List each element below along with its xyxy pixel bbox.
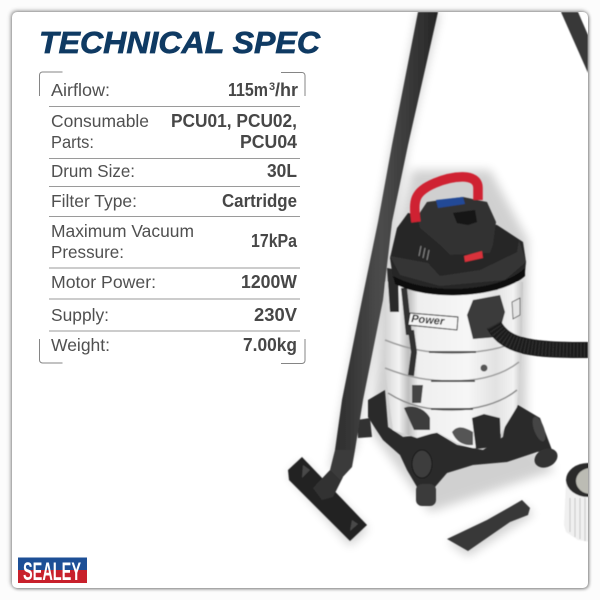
row: supply: 230V <box>254 305 297 325</box>
table corner brackets <box>40 72 305 364</box>
cartridge filter <box>564 462 588 542</box>
red lid catch <box>464 251 483 262</box>
row: motor power: Motor Power: <box>51 272 156 292</box>
row: consumable parts: PCU01, PCU02, <box>171 111 297 131</box>
row: filter type <box>51 191 297 211</box>
row: airflow: 3 <box>269 81 275 93</box>
row: drum size: 30L <box>267 161 297 181</box>
row: consumable parts: Consumable <box>51 111 149 131</box>
power badge on drum <box>408 313 458 330</box>
row: maximum vacuum pressure: Maximum Vacuum <box>51 221 194 241</box>
row: maximum vacuum pressure: 17kPa <box>251 231 298 251</box>
blue control label <box>436 197 465 208</box>
row: weight: Weight: <box>51 335 110 355</box>
row: supply: Supply: <box>51 305 109 325</box>
row: consumable parts: Parts: <box>51 132 94 152</box>
row: filter type: Filter Type: <box>51 191 137 211</box>
flexible hose <box>494 325 588 350</box>
row: airflow: Airflow: <box>51 80 110 100</box>
soft product shadow <box>288 12 555 556</box>
row: motor power: 1200W <box>241 272 297 292</box>
hose elbow <box>467 295 505 339</box>
row: weight: 7.00kg <box>243 335 297 355</box>
row: filter type: Cartridge <box>222 191 297 211</box>
row: drum size <box>51 161 297 181</box>
row: airflow <box>51 80 298 100</box>
Sealey logo <box>18 558 87 586</box>
floor nozzle <box>288 450 367 541</box>
stainless steel drum <box>385 268 523 449</box>
row: maximum vacuum pressure <box>51 221 298 262</box>
lid and motor head <box>390 197 526 295</box>
row: airflow: /hr <box>275 80 298 100</box>
red handle <box>415 177 478 222</box>
row: weight <box>51 335 297 355</box>
row: airflow: 115m <box>228 80 268 100</box>
side label on drum <box>512 298 520 319</box>
Sealey logo: SEALEY <box>23 558 81 586</box>
icon: hose top right <box>561 12 588 73</box>
power badge on drum: Power <box>411 313 445 328</box>
row: consumable parts <box>51 111 297 152</box>
wheeled base <box>357 390 561 506</box>
row: supply <box>51 305 297 325</box>
crevice tool <box>447 500 530 551</box>
title: TECHNICAL SPEC <box>39 25 321 60</box>
row: consumable parts: PCU04 <box>240 132 297 152</box>
row dividers <box>49 106 300 331</box>
row: drum size: Drum Size: <box>51 161 135 181</box>
suction pipe <box>335 12 438 450</box>
vacuum cleaner product illustration <box>288 12 600 556</box>
row: maximum vacuum pressure: Pressure: <box>51 242 124 262</box>
spec table <box>40 72 305 364</box>
row: motor power <box>51 272 297 292</box>
